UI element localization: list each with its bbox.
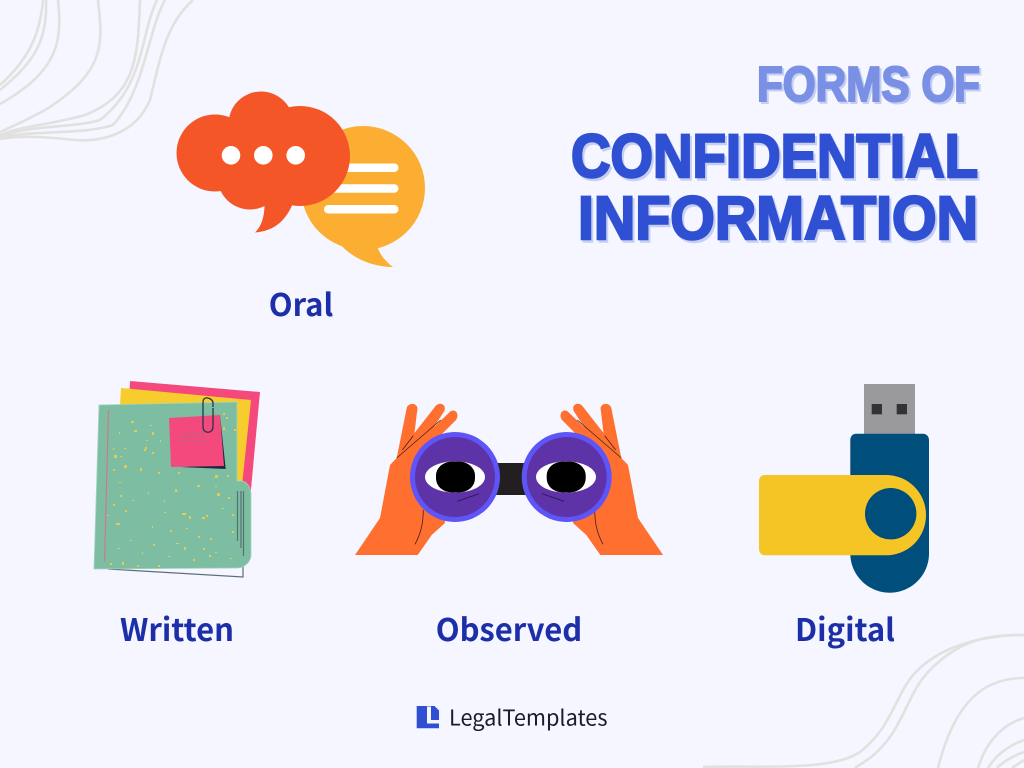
logo: [417, 702, 607, 732]
title line: confidential: CONFIDENTIAL: [573, 124, 980, 192]
label: oral: Oral: [269, 280, 333, 325]
green folder: [94, 402, 251, 569]
title line: forms of: FORMS OF: [759, 60, 982, 114]
left hand: [355, 404, 457, 555]
swivel pivot: [865, 488, 916, 539]
icon: usb drive: [759, 384, 929, 593]
left lens: [410, 432, 500, 522]
title line: information: INFORMATION: [580, 186, 980, 254]
rear sheet outline: [108, 565, 243, 577]
title line: confidential: CONFIDENTIAL: [571, 122, 978, 190]
usb connector: [864, 384, 915, 434]
right hand creases: [577, 420, 621, 544]
label: digital: Digital: [795, 605, 895, 650]
yellow bubble text lines: [324, 164, 398, 214]
sticky note shadow: [180, 415, 226, 469]
icon: binoculars with hands: [355, 404, 663, 555]
connector holes: [872, 404, 907, 414]
swivel cover: [759, 475, 926, 555]
left hand creases: [397, 420, 441, 544]
usb body: [850, 434, 929, 593]
right hand: [561, 404, 663, 555]
sticky note lines: [179, 432, 208, 442]
paper clip: [203, 398, 213, 432]
icon: folder with papers: [94, 381, 260, 577]
binocular bridge: [495, 463, 527, 495]
right lens: [522, 432, 612, 522]
logo wordmark: LegalTemplates: [449, 702, 607, 732]
logo mark: [417, 706, 439, 728]
title: [571, 58, 982, 254]
folder pocket lines: [238, 491, 244, 556]
three dots: [222, 146, 305, 165]
label: observed: Observed: [436, 605, 582, 650]
yellow speech bubble: [301, 126, 425, 267]
title line: forms of: FORMS OF: [757, 58, 980, 112]
label: written: Written: [120, 605, 234, 650]
icon: speech bubbles: [176, 92, 425, 267]
orange cloud bubble: [176, 92, 350, 232]
title line: information: INFORMATION: [578, 184, 978, 252]
sticky note: [169, 415, 224, 467]
folder spine: [104, 410, 108, 562]
yellow speckles: [107, 413, 236, 567]
pink back paper: [125, 381, 260, 500]
yellow paper: [115, 388, 251, 495]
